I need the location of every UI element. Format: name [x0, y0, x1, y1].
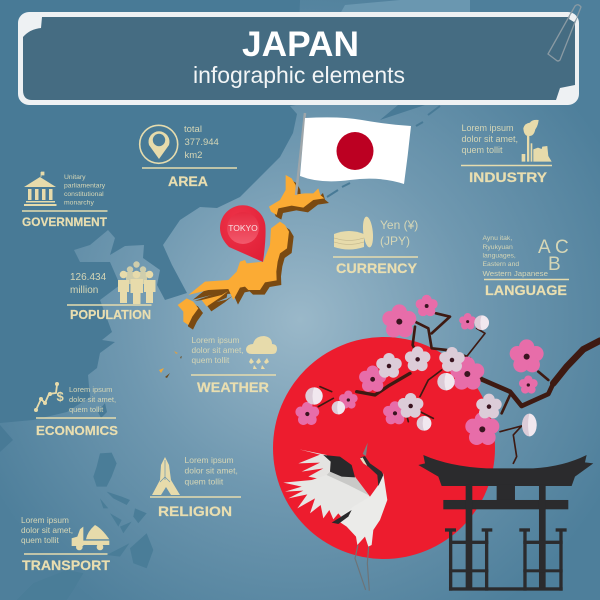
panel: industry: dolor sit amet, [462, 134, 518, 144]
panel: transport: TRANSPORT [22, 557, 110, 573]
cherry branch [318, 313, 600, 463]
panel: language: Western Japanese [482, 269, 548, 278]
red sun [273, 337, 495, 559]
panel: language: Eastern and [482, 261, 519, 268]
panel: area: km2 [184, 150, 202, 161]
flag red disc [336, 132, 374, 170]
title heading: JAPAN [242, 24, 359, 64]
panel: population: 126.434 [70, 272, 107, 283]
crane neck [361, 456, 383, 486]
panel: weather [191, 335, 277, 395]
panel: religion [150, 455, 241, 519]
kuril islands [327, 106, 440, 197]
panel: religion: RELIGION [158, 503, 232, 519]
panel: industry: quem tollit [462, 145, 503, 155]
panel: area: 377.944 [184, 137, 219, 148]
flag pole [296, 113, 305, 195]
panel: area: AREA [168, 173, 208, 189]
crane black patch [323, 455, 355, 477]
map: okinawa islands [159, 351, 182, 378]
panel: industry: INDUSTRY [469, 169, 548, 185]
crane body [337, 473, 387, 547]
icon: letters: C [555, 237, 569, 258]
crane wing tip [332, 510, 352, 524]
panel: transport [21, 515, 110, 573]
panel: language: Aynu itak, [482, 235, 512, 242]
flag cloth [300, 117, 411, 184]
panel: currency: (JPY) [380, 234, 410, 248]
panel: economics: quem tollit [69, 405, 104, 414]
panel: language: languages, [482, 252, 516, 260]
panel: population: POPULATION [70, 308, 151, 322]
icon: cloud and rain [246, 336, 277, 369]
map: japan [178, 175, 329, 330]
panel: government [22, 172, 108, 229]
panel: language [482, 235, 569, 298]
panel: weather: dolor sit amet, [192, 345, 244, 355]
panel: government: Unitary [64, 174, 86, 181]
panel: transport: quem tollit [21, 535, 60, 545]
map orange islands [178, 175, 324, 325]
panel: economics: ECONOMICS [36, 423, 118, 438]
panel: transport: Lorem ipsum [21, 515, 69, 525]
panel: weather: WEATHER [197, 379, 269, 395]
crane legs [355, 545, 369, 591]
panel: weather: Lorem ipsum [192, 335, 240, 345]
icon: chart and dollar: $ [56, 389, 64, 404]
tokyo pin: TOKYO [228, 223, 258, 233]
crane [283, 443, 387, 591]
panel: industry: Lorem ipsum [462, 123, 514, 133]
icon: letters [538, 237, 569, 275]
panel: population: million [70, 285, 98, 296]
panel: economics: dolor sit amet, [69, 395, 116, 404]
panel: currency [333, 216, 418, 276]
icon: letters: A [538, 237, 551, 258]
icon: truck [72, 525, 109, 550]
map: asia land masses [0, 0, 470, 600]
crane upper wing [298, 449, 370, 497]
panel: economics [34, 382, 118, 438]
icon: location [140, 125, 178, 163]
panel: economics: Lorem ipsum [69, 385, 112, 394]
panel: currency: CURRENCY [336, 260, 418, 276]
icon: factory [522, 120, 552, 162]
torii gate [418, 455, 593, 591]
panel: language: LANGUAGE [485, 282, 567, 298]
panel: government: parliamentary [64, 182, 106, 190]
panel: religion: Lorem ipsum [184, 455, 234, 465]
cherry blossoms [295, 295, 544, 445]
map: philippines and borneo [17, 453, 153, 600]
icon: building [24, 172, 56, 206]
crane wing shade [327, 472, 369, 496]
panel: industry [461, 120, 552, 185]
title banner [18, 5, 581, 105]
icon: praying hands [152, 457, 180, 495]
panel: government: constitutional [64, 191, 104, 198]
crane wing [283, 475, 370, 519]
panel: religion: dolor sit amet, [184, 466, 238, 476]
icon: paper clip [548, 5, 581, 61]
panel: government: GOVERNMENT [22, 215, 108, 229]
tokyo pin [220, 205, 266, 262]
panel: language: Ryukyuan [482, 244, 513, 251]
panel: transport: dolor sit amet, [21, 525, 73, 535]
map shadow [182, 180, 329, 330]
panel: area: total [184, 124, 202, 135]
panel: area [140, 124, 237, 189]
icon: coins [334, 216, 374, 250]
panel: currency: Yen (¥) [380, 218, 418, 232]
title subheading: infographic elements [193, 62, 405, 88]
panel: population [67, 261, 156, 322]
icon: people [118, 261, 156, 304]
panel: government: monarchy [64, 200, 94, 206]
panel: weather: quem tollit [192, 355, 230, 365]
crane head and beak [360, 457, 367, 466]
panel: religion: quem tollit [184, 476, 224, 486]
icon: letters: B [548, 254, 561, 275]
japanese flag [296, 113, 411, 195]
